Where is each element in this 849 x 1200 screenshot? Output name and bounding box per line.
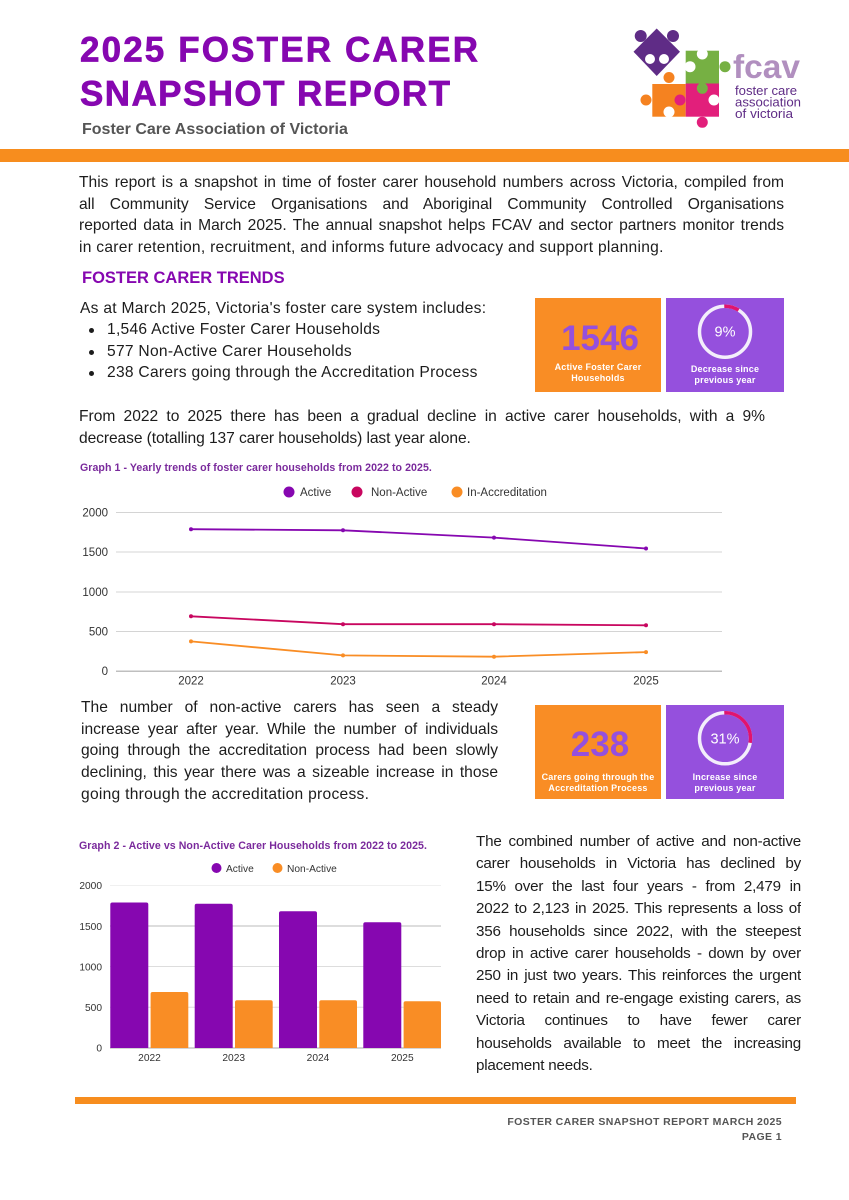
- paragraph: combined households: 356 households since 2022, with the steepest: [476, 923, 801, 940]
- footer text: [507, 1116, 782, 1143]
- graph 2 title: Graph 2 - Active vs Non-Active Carer Households from 2022 to 2025.: [79, 840, 427, 852]
- stat card: 1546 active households: Active Foster Carer: [555, 362, 641, 372]
- paragraph: decline: From 2022 to 2025 there has been a gradual decline in active carer households, with a 9%: [79, 408, 765, 425]
- paragraph: decline: decrease (totalling 137 carer households) last year alone.: [79, 430, 471, 446]
- stat card: 31% increase: [666, 705, 784, 799]
- intro text block: reported data in March 2025. The annual snapshot helps FCAV and sector partners monitor trends: [79, 217, 784, 234]
- stat card: 238 in accreditation: [535, 705, 661, 799]
- logo: association: [735, 94, 801, 110]
- paragraph: non-active and accreditation: declining, this year there was a sizeable increase in those: [81, 764, 498, 781]
- logo: [634, 28, 801, 128]
- paragraph: non-active and accreditation: [81, 699, 498, 803]
- line chart: yearly trends: 2025: [633, 676, 659, 688]
- title: SNAPSHOT REPORT: [80, 75, 450, 114]
- line chart: yearly trends: 1000: [82, 587, 108, 599]
- paragraph: non-active and accreditation: The number of non-active carers has seen a steady: [81, 699, 498, 716]
- line chart: yearly trends: 2023: [330, 676, 356, 688]
- paragraph: combined households: Victoria continues to have fewer carer: [476, 1012, 801, 1029]
- heading: foster carer trends: FOSTER CARER TRENDS: [82, 269, 285, 287]
- bar chart: active vs non-active: 2023: [222, 1053, 245, 1064]
- footer text: FOSTER CARER SNAPSHOT REPORT MARCH 2025: [507, 1116, 782, 1128]
- paragraph: combined households: [476, 833, 801, 1074]
- logo: foster care: [735, 83, 797, 98]
- line chart: yearly trends: In-Accreditation: [467, 487, 547, 499]
- logo: of victoria: [735, 106, 794, 121]
- subtitle: Foster Care Association of Victoria: [82, 121, 348, 138]
- stat card: 1546 active households: [535, 298, 661, 392]
- stat card: 238 in accreditation: Carers going through the: [542, 772, 654, 782]
- paragraph: combined households: need to retain and re-engage existing carers, as: [476, 990, 801, 1007]
- bar chart: active vs non-active: Active: [226, 864, 254, 875]
- stat card: 1546 active households: Households: [571, 372, 625, 382]
- line chart: yearly trends: 500: [89, 626, 108, 638]
- line chart: yearly trends: 2000: [82, 508, 108, 520]
- bar chart: active vs non-active: 0: [96, 1044, 102, 1054]
- bar chart: active vs non-active: 2024: [307, 1053, 330, 1064]
- footer bar: [75, 1097, 796, 1104]
- paragraph: combined households: The combined number of active and non-active: [476, 833, 801, 850]
- paragraph: combined households: 15% over the last four years - from 2,479 in: [476, 878, 801, 895]
- text block: system summary with bullets: As at March 2025, Victoria's foster care system includes:: [80, 300, 486, 317]
- line chart: yearly trends: 2024: [481, 676, 507, 688]
- line chart: yearly trends: Non-Active: [371, 487, 427, 499]
- intro text block: [79, 174, 784, 256]
- title: 2025 FOSTER CARER: [80, 31, 478, 70]
- bar chart: active vs non-active: 500: [85, 1003, 102, 1014]
- paragraph: combined households: drop in active carer households - down by over: [476, 945, 801, 962]
- logo: fcav: [733, 48, 801, 85]
- stat card: 238 in accreditation: Accreditation Process: [548, 782, 648, 792]
- text block: system summary with bullets: [80, 300, 486, 381]
- orange header band: [0, 149, 849, 162]
- paragraph: combined households: placement needs.: [476, 1057, 593, 1074]
- line chart: yearly trends: 1500: [82, 547, 108, 559]
- stat card: 9% decrease: Decrease since: [691, 364, 759, 374]
- stat card: 31% increase: 31%: [710, 732, 740, 748]
- intro text block: all Community Service Organisations and Aboriginal Community Controlled Organisations: [79, 196, 784, 213]
- bar chart: active vs non-active: 1000: [79, 962, 102, 974]
- line chart: yearly trends: 2022: [178, 676, 204, 688]
- stat card: 9% decrease: previous year: [694, 374, 756, 384]
- text block: system summary with bullets: 1,546 Active Foster Carer Households: [107, 321, 380, 338]
- stat card: 1546 active households: 1546: [561, 319, 639, 358]
- footer text: PAGE 1: [742, 1131, 782, 1143]
- paragraph: decline: [79, 408, 765, 446]
- paragraph: non-active and accreditation: increase year after year. While the number of individuals: [81, 721, 498, 738]
- bar chart: active vs non-active: 2025: [391, 1053, 414, 1064]
- line chart: yearly trends: 0: [102, 666, 108, 678]
- paragraph: non-active and accreditation: going through the accreditation process had been slowly: [81, 742, 498, 759]
- stat card: 31% increase: Increase since: [693, 772, 757, 782]
- title: [80, 31, 478, 114]
- intro text block: in carer retention, recruitment, and informs future advocacy and support planning.: [79, 239, 664, 256]
- bar chart: active vs non-active: Non-Active: [287, 864, 337, 875]
- graph 1 title: Graph 1 - Yearly trends of foster carer households from 2022 to 2025.: [80, 462, 432, 474]
- text block: system summary with bullets: 577 Non-Active Carer Households: [107, 343, 352, 360]
- text block: system summary with bullets: 238 Carers going through the Accreditation Process: [107, 364, 478, 381]
- stat card: 9% decrease: 9%: [715, 324, 736, 340]
- paragraph: combined households: 250 in just two years. This reinforces the urgent: [476, 967, 801, 984]
- paragraph: non-active and accreditation: going through the accreditation process.: [81, 786, 369, 803]
- stat card: 31% increase: previous year: [694, 782, 756, 792]
- paragraph: combined households: carer households in Victoria has declined by: [476, 855, 801, 872]
- intro text block: This report is a snapshot in time of foster carer household numbers across Victoria, compiled from: [79, 174, 784, 191]
- line chart: yearly trends: [82, 486, 722, 688]
- stat card: 9% decrease: [666, 298, 784, 392]
- paragraph: combined households: 2022 to 2,123 in 2025. This represents a loss of: [476, 900, 801, 917]
- bar chart: active vs non-active: 2022: [138, 1053, 161, 1064]
- line chart: yearly trends: Active: [300, 487, 331, 499]
- bar chart: active vs non-active: 2000: [79, 881, 102, 892]
- paragraph: combined households: households available to meet the increasing: [476, 1035, 801, 1052]
- stat card: 238 in accreditation: 238: [571, 725, 629, 764]
- bar chart: active vs non-active: 1500: [79, 922, 102, 933]
